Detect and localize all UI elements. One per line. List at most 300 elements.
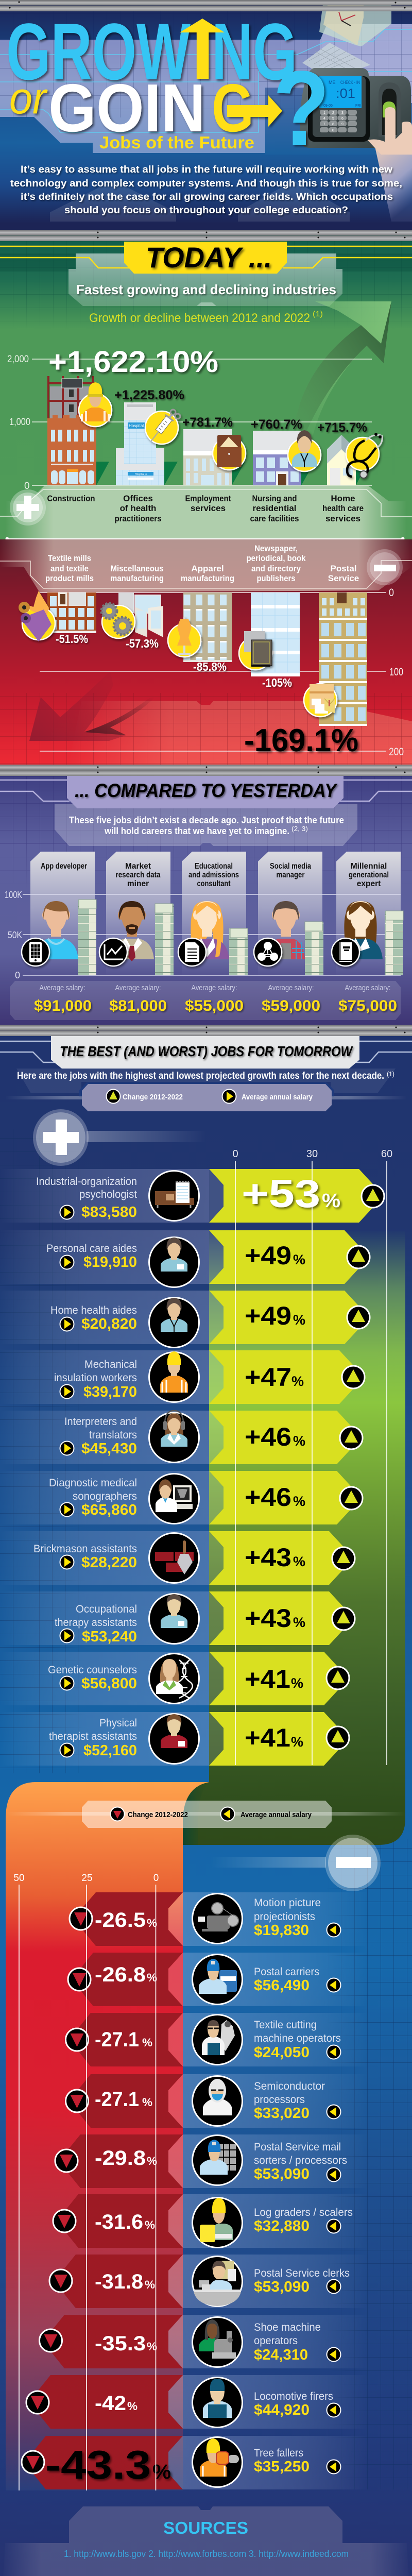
job row: genetic counselors: +41	[245, 1665, 290, 1693]
icon: care aide	[149, 1238, 199, 1287]
label: home health care: health care	[322, 503, 364, 513]
job row: postal carriers: $56,490	[254, 1977, 310, 1994]
icon: fabric rolls	[19, 591, 55, 641]
job row: semiconductor processors: processors	[254, 2094, 305, 2106]
job: market research data miner: miner	[127, 879, 149, 888]
label: postal service: Postal	[330, 564, 357, 573]
job row: motion picture projectionists: Motion picture	[254, 1897, 321, 1909]
icon: time clock screen: CHECK - IN	[340, 80, 360, 85]
job row: home health aides: Home health aides	[50, 1304, 137, 1316]
label: apparel manufacturing	[181, 564, 234, 583]
icon: social network	[254, 938, 282, 966]
job: educational consultant	[178, 862, 248, 1014]
metal rail: today	[0, 230, 412, 241]
chart axis: best jobs: 60	[381, 1148, 392, 1160]
label: textile mills	[45, 553, 94, 583]
icon: line chart	[99, 938, 127, 966]
job row: genetic counselors: $56,800	[81, 1675, 137, 1692]
job: social media manager	[254, 862, 323, 1014]
job: market research data miner: $81,000	[109, 997, 167, 1014]
job row: mechanical insulation workers: +47	[245, 1363, 291, 1392]
label: employment services: services	[191, 503, 226, 513]
icon: stethoscope	[346, 433, 382, 478]
icon: keypad: 5	[332, 117, 334, 121]
title: Growing or Going?	[6, 7, 330, 167]
icon: keypad: 7	[323, 123, 325, 126]
icon: time clock screen: FRI	[355, 104, 361, 108]
growth chart axis	[7, 354, 372, 492]
label: miscellaneous manufacturing	[110, 564, 164, 583]
icon: textile operator	[193, 2014, 242, 2065]
job row: occupational therapy assistants: $53,240	[82, 1629, 137, 1645]
job row: postal service clerks: -31.8	[95, 2270, 143, 2293]
intro text: it’s definitely not the case for all growing career fields. Which occupations	[21, 191, 393, 202]
job row: postal service clerks	[49, 2255, 368, 2308]
label: miscellaneous manufacturing: Miscellaneous	[110, 564, 164, 573]
job row: log graders and scalers: Log graders / scalers	[254, 2207, 353, 2218]
label: apparel manufacturing: manufacturing	[181, 573, 234, 583]
job row: industrial-organization psychologist: %	[322, 1190, 340, 1212]
label: offices of health practitioners: Offices	[123, 494, 153, 503]
chart lines: best jobs	[235, 1161, 387, 1765]
label: nursing and residential care: residential	[252, 503, 297, 513]
label: offices of health practitioners: of health	[120, 503, 156, 513]
job row: occupational therapy assistants: %	[293, 1615, 305, 1630]
money stack	[155, 904, 174, 975]
icon: interpreter headset	[149, 1411, 199, 1462]
job row: diagnostic medical sonographers: $65,860	[81, 1502, 137, 1518]
job: educational consultant: $55,000	[185, 997, 244, 1014]
icon: postal carrier	[193, 1955, 242, 2004]
icon: construction worker	[79, 382, 112, 427]
icon: postal clerk	[193, 2257, 242, 2306]
job row: home health aides: %	[293, 1312, 305, 1328]
bar: apparel manufacturing building	[183, 592, 232, 662]
label: postal service: Service	[328, 573, 359, 583]
bar: health practitioners building: Hospital	[129, 423, 144, 428]
job row: postal service mail sorters: $53,090	[254, 2166, 310, 2182]
panel: best and worst background	[0, 1036, 412, 2576]
job row: semiconductor processors	[66, 2074, 368, 2128]
money stack	[78, 900, 96, 975]
job row: industrial-organization psychologist	[0, 1169, 384, 1223]
job row: postal carriers	[68, 1953, 368, 2006]
bar: postal service building	[319, 592, 367, 726]
job row: home health aides	[0, 1291, 370, 1348]
job row: interpreters and translators: Interpreters and	[64, 1416, 137, 1428]
heading: compared to yesterday: ... COMPARED TO YESTERDAY	[75, 780, 338, 801]
icon: shoe machine operator	[193, 2317, 242, 2367]
job: educational consultant: and admissions	[188, 871, 239, 879]
intro: five new jobs: These five jobs didn’t exist a decade ago. Just proof that the future	[69, 815, 344, 825]
job row: interpreters and translators: $45,430	[81, 1440, 137, 1457]
job row: motion picture projectionists	[70, 1892, 368, 1946]
metal rail: header	[0, 0, 412, 11]
value: apparel manufacturing: -85.8%	[193, 660, 227, 673]
icon: plus	[10, 489, 46, 526]
chart axis: worst jobs: 25	[81, 1873, 93, 1884]
job: millennial generational expert: generational	[349, 871, 389, 879]
panel: growth categories	[0, 485, 412, 541]
label: home health care: services	[325, 514, 360, 523]
legend: worst jobs: Change 2012-2022	[128, 1810, 188, 1819]
job row: tree fallers: %	[152, 2461, 171, 2483]
job row: semiconductor processors: Semiconductor	[254, 2080, 325, 2092]
job row: postal service mail sorters	[55, 2134, 368, 2188]
panel: decline background	[0, 539, 412, 773]
job: app developer: App developer	[41, 862, 87, 871]
legend: worst jobs	[6, 1801, 405, 1828]
salary chart axis: 50K	[8, 930, 22, 940]
job row: genetic counselors: %	[291, 1675, 303, 1691]
job row: shoe machine operators: -35.3	[95, 2332, 146, 2355]
job row: shoe machine operators: %	[147, 2340, 157, 2353]
intro: five new jobs: will hold careers that we have yet to imagine.	[104, 825, 289, 836]
value: health practitioners: +1,225.80%	[114, 388, 184, 402]
value: textile mills: -51.5%	[56, 632, 88, 646]
label: newspaper publishers: Newspaper,	[254, 544, 298, 553]
intro text: It’s easy to assume that all jobs in the future will require working with new	[21, 164, 393, 175]
salary chart axis	[5, 890, 401, 980]
job row: physical therapist assistants: +41	[245, 1723, 290, 1752]
job row: textile cutting machine operators: Textile cutting	[254, 2019, 317, 2031]
label: newspaper publishers: periodical, book	[246, 553, 306, 563]
job row: postal carriers: %	[147, 1971, 157, 1984]
icon: keypad: 8	[332, 123, 334, 126]
job: educational consultant: Educational	[195, 862, 233, 871]
icon: keypad	[320, 110, 357, 132]
label: employment services: Employment	[185, 494, 231, 503]
job row: tree fallers: Tree fallers	[254, 2447, 303, 2459]
job row: home health aides: $20,820	[81, 1316, 137, 1332]
job row: mechanical insulation workers: $39,170	[83, 1384, 137, 1400]
icon: keypad: 1	[323, 111, 325, 115]
bar: home health building	[327, 435, 368, 485]
job row: semiconductor processors: %	[142, 2096, 152, 2109]
job row: diagnostic medical sonographers	[0, 1471, 363, 1524]
job row: physical therapist assistants	[0, 1712, 349, 1766]
chart axis: best jobs: 30	[306, 1148, 318, 1160]
label: home health care: Home	[331, 494, 355, 503]
job row: log graders and scalers: %	[145, 2218, 155, 2231]
label: offices of health practitioners	[114, 494, 162, 523]
label: textile mills: Textile mills	[48, 553, 91, 563]
bar: employment services building	[183, 429, 245, 485]
panel: today background	[0, 230, 412, 539]
job row: physical therapist assistants: %	[291, 1734, 303, 1750]
job row: shoe machine operators	[39, 2315, 368, 2368]
heading: today	[0, 241, 412, 274]
job: market research data miner: research data	[115, 871, 161, 879]
icon: tree faller	[193, 2437, 242, 2487]
job: app developer: Average salary:	[39, 984, 85, 992]
job row: textile cutting machine operators: -27.1	[95, 2028, 139, 2051]
bar: construction building	[47, 376, 109, 485]
background: header	[0, 0, 412, 230]
label: apparel manufacturing: Apparel	[191, 564, 224, 573]
label: miscellaneous manufacturing: manufacturing	[110, 573, 164, 583]
value: postal service: -169.1%	[244, 723, 358, 758]
job: app developer: $91,000	[34, 997, 92, 1014]
job: social media manager: Average salary:	[268, 984, 314, 992]
money stack	[229, 928, 248, 975]
job: millennial generational expert: Average salary:	[345, 984, 390, 992]
icon: keypad: 9	[341, 123, 344, 126]
bar: misc manufacturing building	[118, 592, 163, 637]
job row: occupational therapy assistants: therapy assistants	[55, 1617, 137, 1629]
icon: fingerprint time clock	[300, 68, 411, 148]
chart lines: worst jobs	[19, 1885, 156, 2490]
job row: genetic counselors: Genetic counselors	[48, 1664, 137, 1676]
icon: time clock screen: :01	[336, 86, 355, 101]
icon: nurse	[288, 430, 321, 471]
job row: postal carriers: -26.8	[95, 1963, 146, 1986]
person: app developer	[34, 901, 78, 959]
value: newspaper publishers: -105%	[262, 676, 292, 689]
job: social media manager: Social media	[270, 862, 311, 871]
job row: locomotive firers: %	[127, 2400, 138, 2413]
icon: job folder	[213, 435, 246, 470]
title: Growing or Going?: or	[9, 74, 48, 123]
illustration: ghosted laptop and clock	[302, 0, 391, 73]
icon: minus badge	[210, 1835, 381, 1891]
title: Growing or Going?: ?	[273, 49, 330, 167]
job row: postal carriers: Postal carriers	[254, 1966, 319, 1978]
value: employment services: +781.7%	[182, 415, 233, 430]
job row: occupational therapy assistants	[0, 1591, 355, 1645]
job row: personal care aides: +49	[245, 1241, 291, 1270]
icon: bricks and trowel	[149, 1533, 199, 1583]
label: postal service	[328, 564, 359, 583]
job row: postal service mail sorters: sorters / processors	[254, 2155, 347, 2166]
job row: interpreters and translators: %	[293, 1433, 305, 1449]
job row: semiconductor processors: -27.1	[95, 2088, 139, 2111]
icon: film projector	[193, 1894, 242, 1943]
intro: five new jobs	[69, 815, 344, 836]
job row: semiconductor processors: $33,020	[254, 2105, 310, 2122]
subheading: fastest growing and declining: Fastest growing and declining industries	[76, 282, 336, 297]
job row: locomotive firers	[26, 2375, 368, 2429]
job row: home health aides: +49	[245, 1301, 291, 1330]
text: source list: 1. http://www.bls.gov 2. http://www.forbes.com 3. http://www.indeed.com	[64, 2549, 349, 2559]
job row: log graders and scalers: -31.6	[95, 2211, 143, 2233]
job row: physical therapist assistants: therapist assistants	[49, 1731, 137, 1742]
icon: home health aide	[149, 1297, 199, 1348]
label: newspaper publishers: and directory	[251, 564, 301, 573]
chart axis: worst jobs: 0	[153, 1873, 159, 1884]
value: nursing facilities: +760.7%	[251, 417, 302, 432]
job row: personal care aides: $19,910	[83, 1254, 137, 1270]
icon: document	[178, 938, 206, 966]
icon: locomotive firer	[193, 2377, 242, 2428]
job: social media manager: $59,000	[262, 997, 320, 1014]
decline chart axis: 0	[389, 587, 394, 599]
job: millennial generational expert: expert	[357, 879, 381, 888]
job row: shoe machine operators: Shoe machine	[254, 2321, 321, 2333]
bar: textile mills building	[47, 592, 96, 633]
legend: best jobs: Change 2012-2022	[123, 1093, 183, 1101]
job row: genetic counselors	[0, 1652, 349, 1705]
icon: keypad: 4	[323, 117, 325, 121]
intro: five new jobs: (2, 3)	[291, 825, 308, 833]
job row: postal service mail sorters: Postal Service mail	[254, 2141, 341, 2153]
icon: couch and notepad	[149, 1171, 199, 1221]
job row: locomotive firers: $44,920	[254, 2402, 310, 2418]
job row: postal service mail sorters: %	[147, 2155, 157, 2167]
job row: mechanical insulation workers: insulation workers	[54, 1372, 137, 1384]
heading: today: TODAY ...	[146, 241, 272, 274]
job row: brickmason assistants: +43	[245, 1543, 291, 1572]
job row: tree fallers: -43.3	[45, 2442, 151, 2487]
job: educational consultant: Average salary:	[192, 984, 237, 992]
label: nursing and residential care: care facilities	[250, 514, 299, 523]
job row: brickmason assistants: Brickmason assistants	[33, 1543, 137, 1555]
job row: log graders and scalers: $32,880	[254, 2218, 310, 2234]
icon: occupational therapist	[149, 1594, 199, 1643]
money stack	[305, 922, 323, 975]
icon: syringe	[145, 410, 180, 445]
subheading: growth or decline: Growth or decline between 2012 and 2022	[89, 311, 310, 325]
decline chart axis: 100	[389, 666, 403, 678]
title: Growing or Going?: GOIN	[48, 70, 205, 146]
job row: personal care aides: Personal care aides	[46, 1243, 137, 1255]
label: employment services	[185, 494, 231, 513]
job row: diagnostic medical sonographers: Diagnostic medical	[49, 1477, 137, 1489]
intro text	[10, 164, 402, 216]
growth chart axis: 0	[24, 481, 30, 492]
job row: occupational therapy assistants: Occupational	[76, 1603, 137, 1615]
icon: book	[332, 938, 359, 966]
icon: genetic counselor	[149, 1654, 199, 1703]
arrow: decline	[29, 671, 155, 741]
salary chart axis: 100K	[5, 890, 22, 900]
job row: industrial-organization psychologist: psychologist	[79, 1189, 137, 1200]
value: home health: +715.7%	[317, 420, 367, 435]
money stack	[385, 911, 403, 975]
heading: compared to yesterday	[0, 776, 412, 808]
job row: interpreters and translators: +46	[245, 1422, 291, 1451]
job row: occupational therapy assistants: +43	[245, 1604, 291, 1633]
label: textile mills: product mills	[45, 573, 94, 583]
label: construction: Construction	[47, 494, 95, 503]
icon: log grader	[193, 2198, 242, 2247]
icon: plus badge	[33, 1109, 206, 1166]
growth chart axis: 1,000	[9, 417, 30, 428]
job row: brickmason assistants	[0, 1531, 355, 1585]
label: newspaper publishers	[246, 544, 306, 583]
icon: keypad: 0	[332, 129, 334, 132]
legend: best jobs	[5, 1082, 407, 1111]
title: Growing or Going?: G	[212, 70, 254, 146]
panel: sources	[0, 2506, 412, 2576]
job row: tree fallers: $35,250	[254, 2459, 310, 2475]
job row: mechanical insulation workers: %	[291, 1374, 304, 1389]
heading: sources: SOURCES	[163, 2518, 248, 2537]
salary chart axis: 0	[15, 970, 20, 980]
job row: postal service clerks: Postal Service clerks	[254, 2267, 350, 2279]
label: nursing and residential care: Nursing and	[252, 494, 297, 503]
job row: textile cutting machine operators	[66, 2013, 368, 2066]
intro: projected growth rates: (1)	[387, 1071, 394, 1078]
icon: time clock screen	[319, 76, 362, 108]
growth chart axis: 2,000	[7, 354, 29, 365]
job row: textile cutting machine operators: $24,050	[254, 2044, 310, 2061]
bar: nursing facilities building	[253, 431, 315, 485]
job row: motion picture projectionists: -26.5	[95, 1909, 146, 1931]
icon: keypad: 2	[332, 111, 334, 115]
icon: book	[239, 631, 272, 670]
intro text: should you focus on throughout your college education?	[64, 205, 348, 216]
job row: physical therapist assistants: Physical	[99, 1717, 137, 1729]
title: Growing or Going?: Jobs of the Future	[99, 133, 254, 152]
icon: semiconductor worker	[193, 2076, 242, 2126]
icon: physical therapist	[149, 1714, 199, 1764]
job row: physical therapist assistants: $52,160	[83, 1742, 137, 1759]
person: generational expert	[338, 901, 383, 959]
metal rail: yesterday	[0, 765, 412, 776]
metal rail: best and worst	[0, 1025, 412, 1036]
job row: diagnostic medical sonographers: %	[293, 1494, 305, 1509]
label: offices of health practitioners: practitioners	[114, 514, 162, 523]
value: construction: +1,622.10%	[48, 345, 218, 379]
chart axis: best jobs: 0	[232, 1148, 238, 1160]
job row: motion picture projectionists: projectionists	[254, 1911, 315, 1923]
job: millennial generational expert: Millennial	[351, 862, 387, 871]
label: nursing and residential care	[250, 494, 299, 523]
job: educational consultant: consultant	[197, 879, 231, 888]
icon: smartphone	[22, 938, 49, 966]
decline chart axis	[40, 587, 404, 758]
subheading: growth or decline: (1)	[313, 310, 323, 318]
person: social media manager	[267, 901, 305, 959]
icon: dress form	[168, 617, 201, 657]
chart axis: worst jobs: 50	[13, 1873, 25, 1884]
title: Growing or Going?: GROW	[6, 7, 191, 97]
person: consultant	[185, 901, 229, 959]
job row: industrial-organization psychologist: Industrial-organization	[36, 1176, 137, 1188]
job row: industrial-organization psychologist: +53	[242, 1172, 320, 1216]
heading: best and worst jobs	[0, 1036, 412, 1069]
title: Growing or Going?: I	[191, 7, 214, 96]
job row: motion picture projectionists: $19,830	[254, 1922, 309, 1939]
icon: keypad: 6	[341, 117, 344, 121]
job row: postal service clerks: $53,090	[254, 2279, 310, 2295]
intro text: technology and complex computer systems. And though this is true for some,	[10, 178, 402, 189]
job row: postal service clerks: %	[145, 2278, 155, 2291]
job row: brickmason assistants: %	[293, 1554, 305, 1569]
panel: compared to yesterday background	[0, 765, 412, 1036]
illustration: hand on fingerprint reader	[368, 107, 412, 222]
bar: newspaper publishers building	[251, 592, 300, 676]
job: market research data miner: Market	[125, 862, 151, 871]
job row: shoe machine operators: operators	[254, 2335, 298, 2347]
value: misc manufacturing: -57.3%	[126, 637, 159, 650]
legend: worst jobs: Average annual salary	[241, 1810, 312, 1819]
job: market research data miner: Average salary:	[115, 984, 161, 992]
job row: brickmason assistants: $28,220	[81, 1554, 137, 1571]
icon: gears	[101, 603, 135, 638]
icon: time clock screen: 09-05	[323, 104, 333, 108]
icon: time clock screen: ME	[329, 80, 336, 85]
job: app developer	[22, 862, 96, 1014]
job: social media manager: manager	[276, 871, 305, 879]
decline chart axis: 200	[389, 746, 404, 758]
job cards	[30, 852, 401, 976]
icon: parcels and mail	[304, 684, 337, 717]
job row: interpreters and translators: translators	[89, 1429, 137, 1441]
icon: insulation worker	[149, 1351, 199, 1402]
job row: textile cutting machine operators: machine operators	[254, 2032, 341, 2044]
